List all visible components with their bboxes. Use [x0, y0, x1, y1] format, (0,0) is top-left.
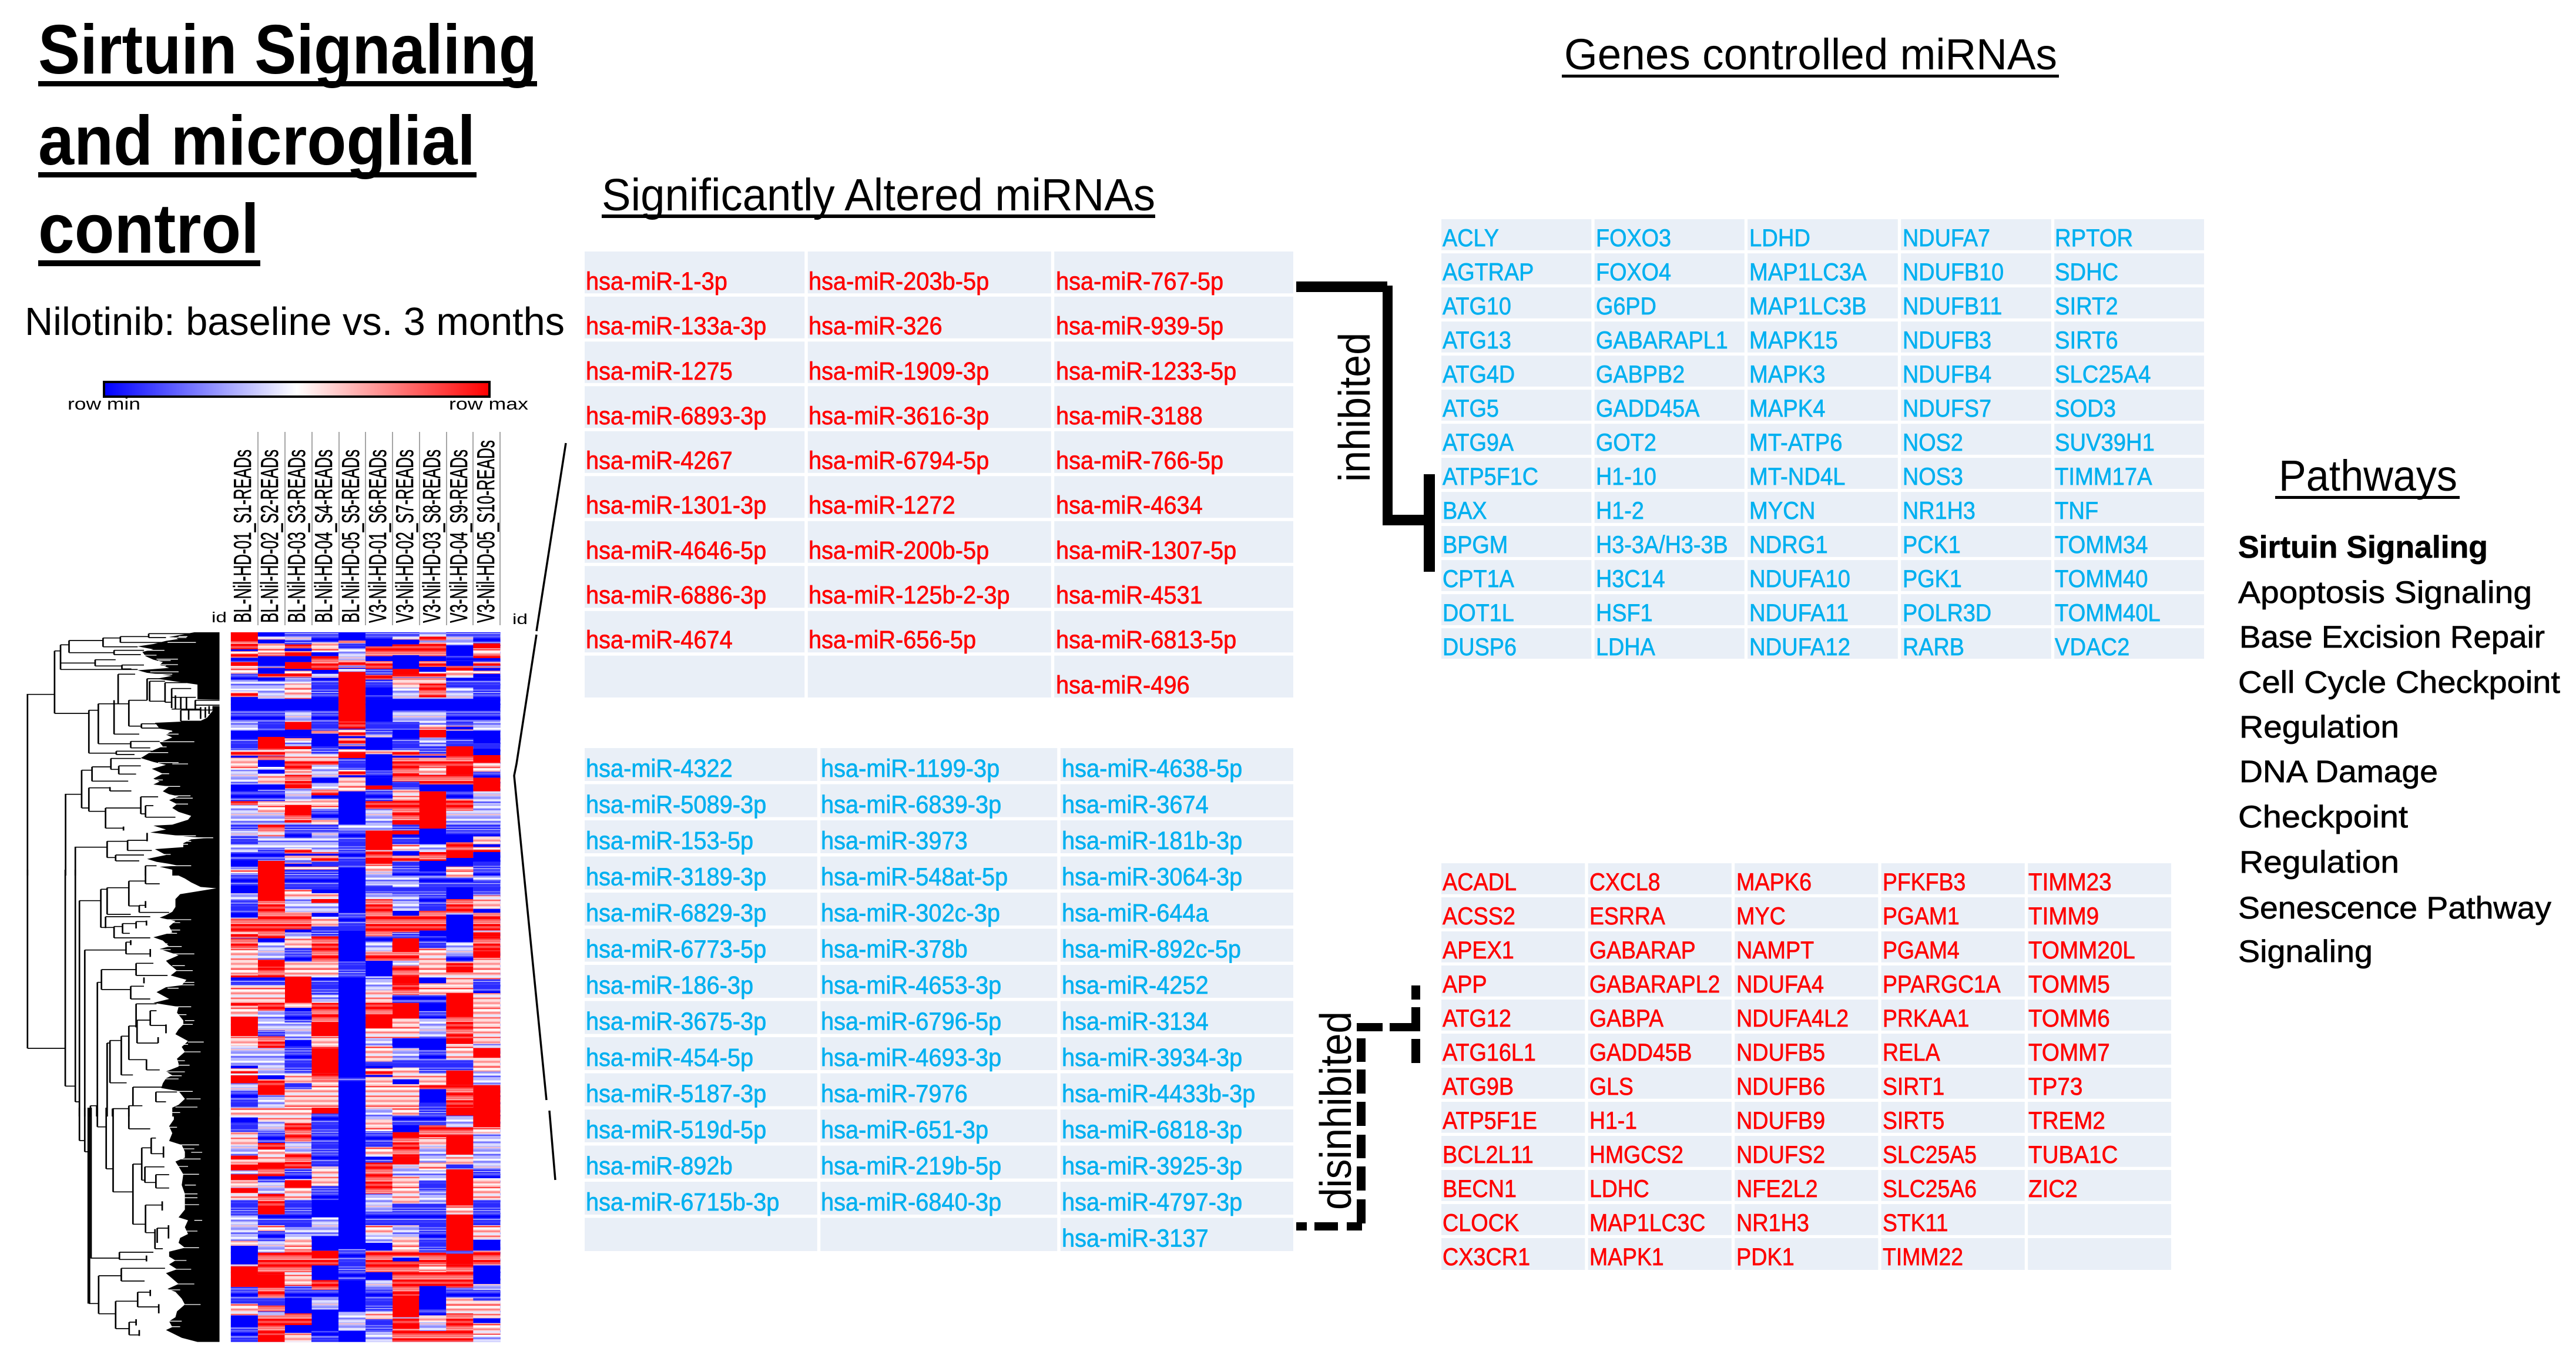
table: disinhibited genes (red): ESRRA: [1589, 903, 1665, 930]
pathways list: Apoptosis Signaling: [2238, 575, 2532, 610]
table: decreased miRNAs (blue): hsa-miR-6839-3p: [821, 790, 1001, 819]
table: decreased miRNAs (blue): hsa-miR-4653-3p: [821, 971, 1001, 999]
table: inhibited genes (blue): ATG9A: [1443, 429, 1514, 456]
table: disinhibited genes (red): MAPK6: [1736, 869, 1812, 896]
table: decreased miRNAs (blue): hsa-miR-6829-3p: [586, 899, 766, 927]
table: disinhibited genes (red): BCL2L11: [1443, 1141, 1534, 1168]
table: decreased miRNAs (blue): hsa-miR-5089-3p: [586, 790, 766, 819]
table: disinhibited genes (red): MAPK1: [1589, 1243, 1664, 1271]
zoom callout lines: [514, 443, 566, 1180]
heatmap column labels: BL-Nil-HD-03_S3-READs: [283, 450, 310, 623]
table: inhibited genes (blue): AGTRAP: [1443, 259, 1534, 286]
table: increased miRNAs (red): hsa-miR-326: [809, 312, 942, 340]
table: disinhibited genes (red): NDUFB6: [1736, 1073, 1825, 1100]
connector: inhibited bracket: inhibited: [1330, 333, 1379, 482]
table: disinhibited genes (red): BECN1: [1443, 1175, 1517, 1202]
table: decreased miRNAs (blue): hsa-miR-6796-5p: [821, 1007, 1001, 1035]
table: disinhibited genes (red): ATG12: [1443, 1005, 1511, 1032]
subtitle: Nilotinib: baseline vs. 3 months: [25, 300, 565, 344]
table: inhibited genes (blue): FOXO4: [1596, 259, 1671, 286]
table: disinhibited genes (red): TREM2: [2028, 1106, 2105, 1134]
table: disinhibited genes (red): PRKAA1: [1883, 1005, 1969, 1032]
table: inhibited genes (blue): GOT2: [1596, 429, 1656, 456]
table: disinhibited genes (red): TOMM7: [2028, 1038, 2110, 1066]
table: inhibited genes (blue): NDUFA7: [1903, 224, 1990, 252]
table: inhibited genes (blue): NDUFA12: [1749, 633, 1850, 660]
table: inhibited genes (blue): BPGM: [1443, 531, 1508, 558]
table: disinhibited genes (red): ZIC2: [2028, 1174, 2078, 1202]
table: inhibited genes (blue): MAP1LC3A: [1749, 258, 1867, 286]
table: increased miRNAs (red): hsa-miR-6794-5p: [809, 447, 989, 474]
table: disinhibited genes (red): NDUFB9: [1736, 1107, 1825, 1134]
table: disinhibited genes (red): SLC25A6: [1883, 1175, 1977, 1203]
table: disinhibited genes (red): MYC: [1736, 903, 1786, 930]
pathways list: Base Excision Repair: [2239, 620, 2545, 655]
title: [38, 11, 537, 268]
table: disinhibited genes (red): TOMM20L: [2028, 936, 2135, 964]
table: decreased miRNAs (blue): hsa-miR-892c-5p: [1062, 935, 1241, 963]
table: inhibited genes (blue): TNF: [2055, 497, 2098, 524]
pathways list: Senescence Pathway: [2238, 891, 2552, 926]
table: increased miRNAs (red): hsa-miR-125b-2-3p: [809, 581, 1010, 609]
table: inhibited genes (blue): VDAC2: [2055, 633, 2129, 660]
table: inhibited genes (blue): SUV39H1: [2055, 428, 2155, 456]
table: inhibited genes (blue): NR1H3: [1903, 497, 1975, 524]
table: decreased miRNAs (blue): hsa-miR-4322: [586, 755, 733, 782]
heatmap column labels: [212, 432, 528, 628]
pathways list: Checkpoint: [2238, 800, 2408, 834]
table: increased miRNAs (red): hsa-miR-1272: [809, 491, 955, 519]
table: decreased miRNAs (blue): hsa-miR-3137: [1062, 1224, 1209, 1252]
table: increased miRNAs (red): hsa-miR-4531: [1056, 581, 1203, 609]
table: decreased miRNAs (blue): hsa-miR-6715b-3p: [586, 1188, 779, 1216]
table: disinhibited genes (red): NDUFA4: [1736, 971, 1824, 998]
table: inhibited genes (blue): NDUFA11: [1749, 599, 1849, 626]
table: disinhibited genes (red): HMGCS2: [1589, 1141, 1683, 1169]
table: inhibited genes (blue): NDUFA10: [1749, 565, 1850, 592]
table: disinhibited genes (red): SLC25A5: [1883, 1141, 1977, 1169]
table: inhibited genes (blue): H3-3A/H3-3B: [1596, 531, 1728, 558]
table: increased miRNAs (red): hsa-miR-939-5p: [1056, 312, 1223, 340]
table: disinhibited genes (red): NAMPT: [1736, 937, 1814, 964]
table: decreased miRNAs (blue): hsa-miR-181b-3p: [1062, 827, 1242, 854]
table: inhibited genes (blue): RPTOR: [2055, 224, 2133, 252]
table: disinhibited genes (red): APEX1: [1443, 937, 1514, 964]
pathways list: Regulation: [2239, 845, 2399, 880]
table: increased miRNAs (red): hsa-miR-133a-3p: [586, 312, 766, 340]
table: decreased miRNAs (blue): hsa-miR-6818-3p: [1062, 1116, 1242, 1144]
table: disinhibited genes (red): GABARAP: [1589, 937, 1696, 964]
table: decreased miRNAs (blue): hsa-miR-4693-3p: [821, 1044, 1001, 1071]
heatmap column labels: BL-Nil-HD-02_S2-READs: [256, 450, 283, 623]
table: increased miRNAs (red): hsa-miR-3188: [1056, 402, 1203, 430]
table: disinhibited genes (red): ACSS2: [1443, 903, 1515, 930]
table: disinhibited genes (red): TOMM6: [2028, 1004, 2110, 1032]
table: disinhibited genes (red): RELA: [1883, 1039, 1940, 1067]
table: decreased miRNAs (blue): hsa-miR-548at-5p: [821, 863, 1008, 891]
table: inhibited genes (blue): DOT1L: [1443, 599, 1514, 626]
heatmap colour legend: row min: [68, 395, 140, 414]
table: inhibited genes (blue): MAPK4: [1749, 394, 1826, 422]
table: decreased miRNAs (blue): hsa-miR-3675-3p: [586, 1007, 766, 1035]
table: decreased miRNAs (blue): hsa-miR-651-3p: [821, 1116, 988, 1144]
connector: disinhibited dashed bracket: [1296, 985, 1420, 1230]
table: disinhibited genes (red): GABPA: [1589, 1005, 1663, 1032]
table: decreased miRNAs (blue): hsa-miR-5187-3p: [586, 1079, 766, 1108]
table: increased miRNAs (red): hsa-miR-3616-3p: [809, 402, 989, 430]
table: increased miRNAs (red): hsa-miR-4267: [586, 447, 733, 474]
table: inhibited genes (blue): CPT1A: [1443, 565, 1514, 592]
table: increased miRNAs (red): hsa-miR-4634: [1056, 491, 1203, 519]
table: inhibited genes (blue): ATG13: [1443, 327, 1511, 354]
heatmap column labels: BL-Nil-HD-01_S1-READs: [229, 450, 256, 623]
table: decreased miRNAs (blue): hsa-miR-454-5p: [586, 1044, 753, 1071]
table: increased miRNAs (red): hsa-miR-4646-5p: [586, 537, 766, 564]
table: inhibited genes (blue): MT-ATP6: [1749, 428, 1843, 456]
table: increased miRNAs (red): hsa-miR-6893-3p: [586, 402, 766, 430]
table: inhibited genes (blue): GADD45A: [1596, 395, 1700, 422]
table: inhibited genes (blue): HSF1: [1596, 599, 1653, 626]
heatmap: [231, 632, 501, 1342]
table: decreased miRNAs (blue): hsa-miR-186-3p: [586, 971, 753, 999]
table: inhibited genes (blue): H1-10: [1596, 463, 1656, 490]
pathways list: DNA Damage: [2239, 755, 2438, 789]
table: increased miRNAs (red): hsa-miR-6886-3p: [586, 581, 766, 609]
table: inhibited genes (blue): SLC25A4: [2055, 360, 2151, 388]
table: inhibited genes (blue): TIMM17A: [2055, 462, 2152, 490]
title: control: [38, 190, 259, 268]
table: increased miRNAs (red): hsa-miR-1-3p: [586, 267, 727, 295]
table: disinhibited genes (red): APP: [1443, 971, 1487, 998]
table: increased miRNAs (red): hsa-miR-1909-3p: [809, 357, 989, 385]
table: inhibited genes (blue): MAP1LC3B: [1749, 292, 1867, 320]
heading: pathways: Pathways: [2279, 451, 2457, 500]
table: inhibited genes (blue): NDUFB3: [1903, 327, 1991, 354]
heatmap column labels: id: [212, 609, 227, 626]
table: disinhibited genes (red): ATP5F1E: [1443, 1107, 1537, 1134]
table: inhibited genes (blue): LDHA: [1596, 633, 1655, 660]
table: disinhibited genes (red): [1441, 863, 2171, 1271]
table: inhibited genes (blue): PCK1: [1903, 531, 1961, 558]
table: disinhibited genes (red): NDUFS2: [1736, 1141, 1825, 1168]
table: inhibited genes (blue): LDHD: [1749, 224, 1810, 252]
table: inhibited genes (blue): MAPK3: [1749, 360, 1826, 388]
heatmap column labels: BL-Nil-HD-04_S4-READs: [310, 450, 337, 623]
heading: genes controlled miRNAs: Genes controlled miRNAs: [1564, 30, 2057, 79]
table: decreased miRNAs (blue): hsa-miR-3064-3p: [1062, 863, 1242, 891]
heatmap column labels: V3-Nil-HD-01_S6-READs: [364, 450, 391, 623]
table: disinhibited genes (red): NDUFB5: [1736, 1039, 1825, 1066]
table: disinhibited genes (red): TIMM9: [2028, 901, 2099, 930]
table: decreased miRNAs (blue): hsa-miR-6773-5p: [586, 935, 766, 963]
table: disinhibited genes (red): ATG9B: [1443, 1073, 1514, 1100]
table: inhibited genes (blue): SIRT2: [2055, 292, 2118, 320]
dendrogram: [28, 632, 220, 1342]
table: decreased miRNAs (blue): hsa-miR-3925-3p: [1062, 1152, 1242, 1180]
table: disinhibited genes (red): STK11: [1883, 1209, 1948, 1237]
table: inhibited genes (blue): RARB: [1903, 633, 1964, 660]
table: increased miRNAs (red): hsa-miR-203b-5p: [809, 267, 989, 295]
heatmap column labels: V3-Nil-HD-05_S10-READs: [472, 440, 499, 623]
table: inhibited genes (blue): NDUFB10: [1903, 259, 2004, 286]
table: increased miRNAs (red): [585, 252, 1293, 699]
heatmap column labels: id: [512, 611, 528, 628]
pathways list: [2238, 530, 2560, 969]
table: disinhibited genes (red): H1-1: [1589, 1107, 1637, 1135]
table: inhibited genes (blue): TOMM34: [2055, 531, 2148, 558]
table: decreased miRNAs (blue): hsa-miR-4638-5p: [1062, 755, 1242, 782]
table: inhibited genes (blue): ATP5F1C: [1443, 463, 1538, 490]
table: decreased miRNAs (blue): hsa-miR-4433b-3p: [1062, 1079, 1255, 1108]
heading: significantly altered miRNAs: Significantly Altered miRNAs: [602, 170, 1155, 220]
table: decreased miRNAs (blue): hsa-miR-4797-3p: [1062, 1188, 1242, 1216]
table: increased miRNAs (red): hsa-miR-1307-5p: [1056, 537, 1236, 564]
table: inhibited genes (blue): ATG4D: [1443, 361, 1515, 388]
table: disinhibited genes (red): GABARAPL2: [1589, 971, 1720, 998]
table: disinhibited genes (red): MAP1LC3C: [1589, 1209, 1705, 1237]
pathways list: Regulation: [2239, 710, 2399, 745]
table: decreased miRNAs (blue): hsa-miR-644a: [1062, 899, 1209, 927]
table: disinhibited genes (red): ACADL: [1443, 869, 1517, 896]
table: decreased miRNAs (blue): hsa-miR-892b: [586, 1152, 733, 1180]
table: disinhibited genes (red): NFE2L2: [1736, 1175, 1818, 1202]
table: decreased miRNAs (blue): hsa-miR-1199-3p: [821, 755, 999, 782]
heatmap column labels: V3-Nil-HD-02_S7-READs: [391, 450, 418, 623]
table: decreased miRNAs (blue): hsa-miR-219b-5p: [821, 1152, 1001, 1180]
title: Sirtuin Signaling: [38, 11, 537, 89]
table: inhibited genes (blue): G6PD: [1596, 293, 1656, 320]
table: decreased miRNAs (blue): hsa-miR-519d-5p: [586, 1116, 766, 1144]
table: decreased miRNAs (blue): hsa-miR-3189-3p: [586, 863, 766, 891]
table: inhibited genes (blue): MAPK15: [1749, 326, 1838, 354]
table: inhibited genes (blue): BAX: [1443, 497, 1487, 524]
table: inhibited genes (blue): GABARAPL1: [1596, 327, 1728, 354]
heatmap column labels: V3-Nil-HD-04_S9-READs: [445, 450, 472, 623]
table: inhibited genes (blue): ATG5: [1443, 395, 1499, 422]
table: increased miRNAs (red): hsa-miR-1275: [586, 357, 733, 385]
table: disinhibited genes (red): TIMM23: [2028, 867, 2112, 896]
table: disinhibited genes (red): CLOCK: [1443, 1209, 1520, 1236]
table: disinhibited genes (red): PPARGC1A: [1883, 971, 2001, 998]
table: disinhibited genes (red): PGAM1: [1883, 903, 1960, 930]
table: decreased miRNAs (blue): hsa-miR-3674: [1062, 790, 1209, 819]
table: inhibited genes (blue): H1-2: [1596, 497, 1644, 524]
table: disinhibited genes (red): ATG16L1: [1443, 1039, 1536, 1066]
table: inhibited genes (blue): NDUFS7: [1903, 395, 1991, 422]
table: increased miRNAs (red): hsa-miR-767-5p: [1056, 267, 1223, 295]
table: inhibited genes (blue): NDUFB4: [1903, 361, 1991, 388]
table: inhibited genes (blue): FOXO3: [1596, 224, 1671, 252]
table: disinhibited genes (red): CXCL8: [1589, 869, 1660, 896]
table: increased miRNAs (red): hsa-miR-1301-3p: [586, 491, 766, 519]
table: decreased miRNAs (blue): hsa-miR-3973: [821, 827, 968, 854]
table: inhibited genes (blue): GABPB2: [1596, 361, 1685, 388]
table: disinhibited genes (red): CX3CR1: [1443, 1243, 1530, 1270]
table: decreased miRNAs (blue): hsa-miR-3934-3p: [1062, 1044, 1242, 1071]
table: inhibited genes (blue): MYCN: [1749, 497, 1815, 524]
table: disinhibited genes (red): NR1H3: [1736, 1209, 1809, 1236]
table: decreased miRNAs (blue): hsa-miR-4252: [1062, 971, 1209, 999]
table: inhibited genes (blue): H3C14: [1596, 565, 1665, 592]
table: inhibited genes (blue): SOD3: [2055, 394, 2116, 422]
heatmap column labels: BL-Nil-HD-05_S5-READs: [337, 450, 364, 623]
table: decreased miRNAs (blue): hsa-miR-153-5p: [586, 827, 753, 854]
table: inhibited genes (blue): DUSP6: [1443, 633, 1517, 660]
pathways list: Cell Cycle Checkpoint: [2238, 665, 2560, 700]
table: disinhibited genes (red): TP73: [2028, 1072, 2082, 1100]
table: inhibited genes (blue): SDHC: [2055, 258, 2118, 286]
table: increased miRNAs (red): hsa-miR-4674: [586, 626, 733, 653]
table: decreased miRNAs (blue): hsa-miR-302c-3p: [821, 899, 1000, 927]
table: disinhibited genes (red): SIRT1: [1883, 1073, 1944, 1101]
table: inhibited genes (blue): NDUFB11: [1903, 293, 2002, 320]
table: disinhibited genes (red): GLS: [1589, 1073, 1634, 1101]
table: inhibited genes (blue): ACLY: [1443, 224, 1499, 252]
pathways list: Signaling: [2238, 934, 2373, 969]
table: disinhibited genes (red): PGAM4: [1883, 937, 1960, 964]
table: inhibited genes (blue): POLR3D: [1903, 599, 1991, 626]
table: disinhibited genes (red): TIMM22: [1883, 1243, 1963, 1271]
table: inhibited genes (blue): MT-ND4L: [1749, 462, 1845, 490]
table: disinhibited genes (red): SIRT5: [1883, 1107, 1944, 1135]
pathways list: Sirtuin Signaling: [2238, 530, 2488, 565]
table: disinhibited genes (red): PFKFB3: [1883, 869, 1965, 896]
table: inhibited genes (blue): NOS3: [1903, 463, 1963, 490]
table: disinhibited genes (red): LDHC: [1589, 1175, 1649, 1203]
heatmap column labels: V3-Nil-HD-03_S8-READs: [418, 450, 445, 623]
table: increased miRNAs (red): hsa-miR-1233-5p: [1056, 357, 1236, 385]
table: increased miRNAs (red): hsa-miR-6813-5p: [1056, 626, 1236, 653]
table: decreased miRNAs (blue): hsa-miR-7976: [821, 1079, 968, 1108]
table: disinhibited genes (red): PDK1: [1736, 1243, 1795, 1270]
table: increased miRNAs (red): hsa-miR-766-5p: [1056, 447, 1223, 474]
heatmap colour legend: [68, 382, 529, 414]
table: decreased miRNAs (blue): [585, 748, 1293, 1252]
table: increased miRNAs (red): hsa-miR-200b-5p: [809, 537, 989, 564]
table: decreased miRNAs (blue): hsa-miR-3134: [1062, 1007, 1209, 1035]
table: decreased miRNAs (blue): hsa-miR-6840-3p: [821, 1188, 1001, 1216]
table: increased miRNAs (red): hsa-miR-656-5p: [809, 626, 976, 653]
heatmap colour legend: row max: [449, 395, 529, 414]
table: disinhibited genes (red): GADD45B: [1589, 1039, 1692, 1067]
table: inhibited genes (blue): TOMM40L: [2055, 599, 2161, 626]
table: inhibited genes (blue): [1441, 219, 2204, 660]
table: disinhibited genes (red): TUBA1C: [2028, 1140, 2118, 1168]
table: inhibited genes (blue): NOS2: [1903, 429, 1963, 456]
table: disinhibited genes (red): TOMM5: [2028, 970, 2110, 998]
table: inhibited genes (blue): TOMM40: [2055, 565, 2148, 592]
table: inhibited genes (blue): SIRT6: [2055, 326, 2118, 354]
connector: disinhibited dashed bracket: disinhibited: [1311, 1011, 1360, 1210]
table: decreased miRNAs (blue): hsa-miR-378b: [821, 935, 968, 963]
connector: inhibited bracket: [1296, 281, 1435, 572]
table: disinhibited genes (red): NDUFA4L2: [1736, 1005, 1849, 1032]
table: inhibited genes (blue): PGK1: [1903, 565, 1962, 592]
table: increased miRNAs (red): hsa-miR-496: [1056, 671, 1190, 699]
title: and microglial: [38, 102, 475, 180]
table: inhibited genes (blue): ATG10: [1443, 293, 1511, 320]
table: inhibited genes (blue): NDRG1: [1749, 531, 1828, 558]
